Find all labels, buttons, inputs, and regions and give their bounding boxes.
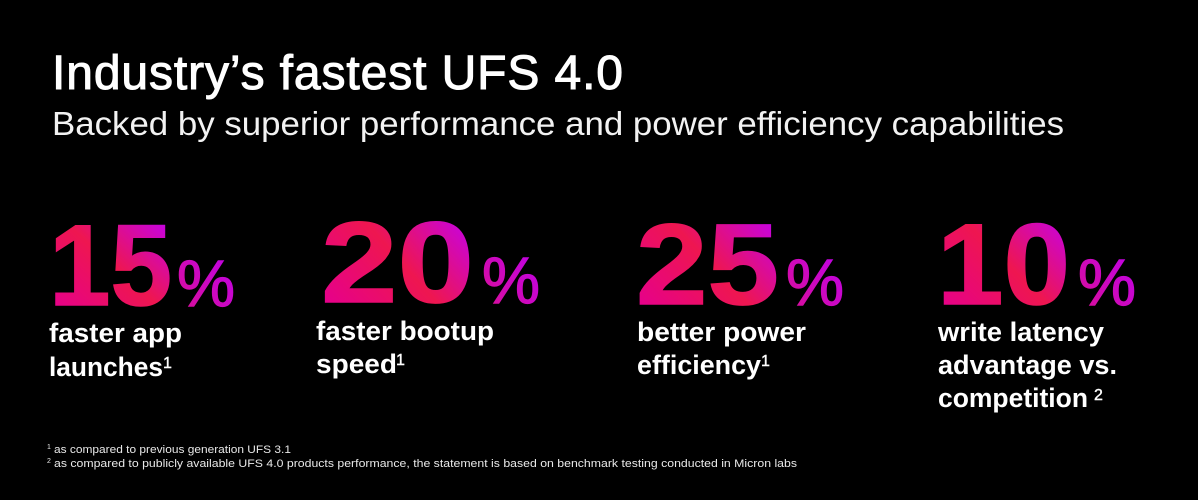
label: write latency (937, 317, 1104, 347)
percent sign: % (786, 245, 844, 319)
footnotes (47, 444, 798, 470)
number 25: 25 (636, 201, 779, 329)
number 20: 20 (321, 199, 474, 327)
percent sign: % (1078, 245, 1136, 319)
stat: 25% better power efficiency (636, 201, 844, 380)
title: Industry’s fastest UFS 4.0 (52, 47, 623, 100)
footnotes: 2 (47, 458, 51, 465)
subtitle: Backed by superior performance and power efficiency capabilities (52, 105, 1064, 142)
stat: 10% write latency advantage (937, 201, 1136, 413)
label: efficiency (637, 350, 761, 380)
label (637, 317, 807, 380)
number 15: 15 (49, 202, 172, 330)
percent sign: % (482, 243, 540, 317)
stat: 15% faster app launches (49, 202, 235, 382)
label (49, 318, 182, 382)
footnotes: as compared to publicly available UFS 4.0 products performance, the statement is based on benchmark testing conducted in Micron labs (54, 458, 798, 470)
label: 1 (761, 353, 770, 370)
stat: 20% faster bootup speed (316, 199, 540, 379)
percent sign: % (177, 246, 235, 320)
footnotes: as compared to previous generation UFS 3.1 (54, 444, 291, 456)
label: faster bootup (316, 316, 494, 346)
label: 2 (1094, 387, 1103, 404)
label: advantage vs. (938, 350, 1117, 380)
footnotes: 1 (47, 444, 51, 451)
label: competition (938, 383, 1088, 413)
label: 1 (163, 355, 172, 372)
label: 1 (396, 352, 405, 369)
label (937, 317, 1117, 413)
label: faster app (49, 318, 182, 348)
label: launches (49, 352, 163, 382)
number 10: 10 (937, 201, 1070, 329)
label: speed (316, 349, 397, 379)
label (316, 316, 494, 379)
label: better power (637, 317, 807, 347)
